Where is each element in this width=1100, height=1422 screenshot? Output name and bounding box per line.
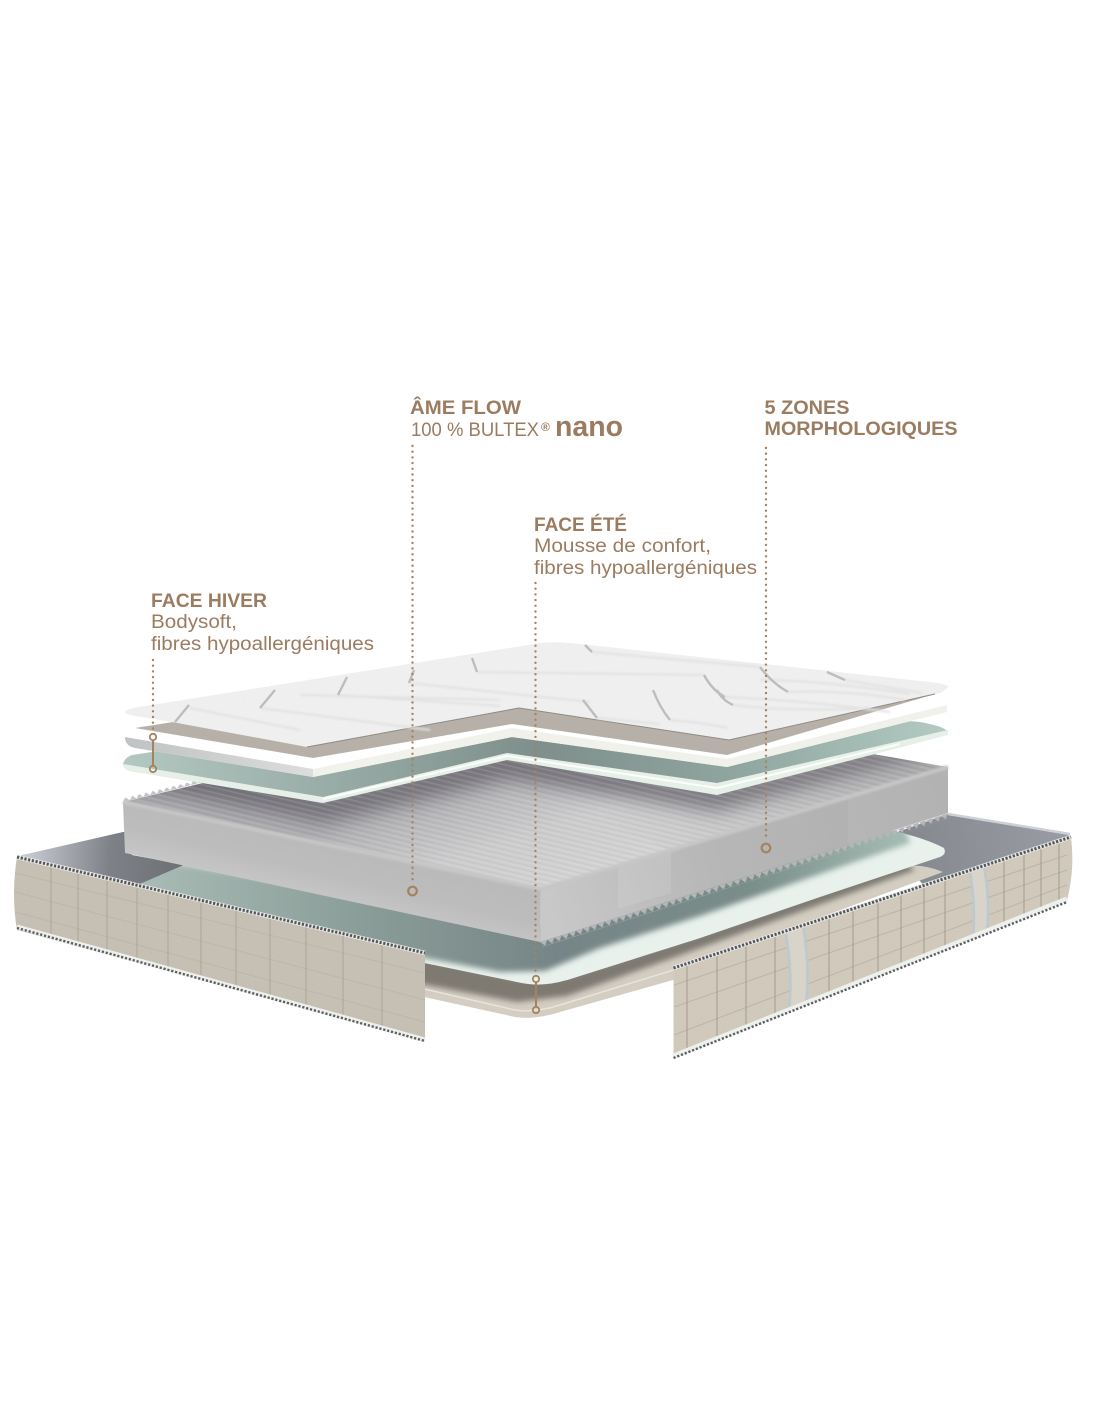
mattress exploded illustration — [14, 642, 1072, 1058]
callout: face ete: fibres hypoallergéniques — [534, 558, 757, 579]
cover interior: left back wall — [18, 832, 191, 886]
callout: face ete: Mousse de confort, — [534, 536, 711, 557]
foam left side — [123, 802, 541, 942]
callout: face ete — [533, 514, 757, 1013]
callout: face hiver — [150, 591, 374, 772]
callout: ame flow — [408, 397, 623, 895]
foam serrated upper-left edge — [123, 779, 204, 802]
piping right — [674, 837, 1071, 1058]
quilting channels: grooves — [175, 645, 845, 722]
quilting seams left — [15, 865, 425, 1029]
callout: 5 zones morphologiques — [762, 398, 958, 852]
callout: ame flow: ÂME FLOW — [410, 397, 521, 419]
quilting seams right — [674, 841, 1067, 1053]
foam top surface — [125, 754, 947, 888]
callout: face hiver: FACE HIVER — [151, 591, 267, 612]
callout: face hiver: fibres hypoallergéniques — [151, 634, 374, 655]
foam serrated lower edge — [540, 813, 950, 947]
foam right side with zones — [540, 767, 948, 942]
foam core: Bultex nano — [122, 754, 950, 947]
callout: face hiver: Bodysoft, — [151, 612, 237, 633]
pale rim of mint layer — [123, 730, 948, 803]
callout: ame flow: 100 % BULTEX — [411, 420, 539, 441]
piping left — [17, 857, 425, 1041]
white layer side strip centre — [313, 728, 512, 777]
callout: 5 zones morphologiques: 5 ZONES — [764, 398, 850, 419]
winter face: beige underside — [135, 680, 942, 758]
white layer side strip right — [512, 705, 947, 767]
white layer side strip left — [125, 737, 313, 777]
cover: left front panel — [14, 857, 425, 1041]
soft foam top edge — [123, 767, 948, 889]
summer face: white layer — [125, 680, 947, 777]
quilted top layer — [125, 642, 948, 747]
cover: right front panel — [674, 837, 1072, 1058]
lower mint layer — [140, 830, 945, 985]
elastic straps — [786, 866, 988, 1012]
callout: ame flow: nano — [555, 411, 623, 443]
quilting channels: soft lines — [190, 652, 922, 730]
callout: 5 zones morphologiques: MORPHOLOGIQUES — [764, 419, 958, 440]
callout: ame flow: ® — [541, 420, 550, 434]
summer face: mint layer — [123, 690, 948, 803]
cover interior: right back wall — [880, 814, 1070, 892]
callout: face ete: FACE ÉTÉ — [534, 514, 627, 536]
bottom beige layer — [410, 862, 943, 1018]
